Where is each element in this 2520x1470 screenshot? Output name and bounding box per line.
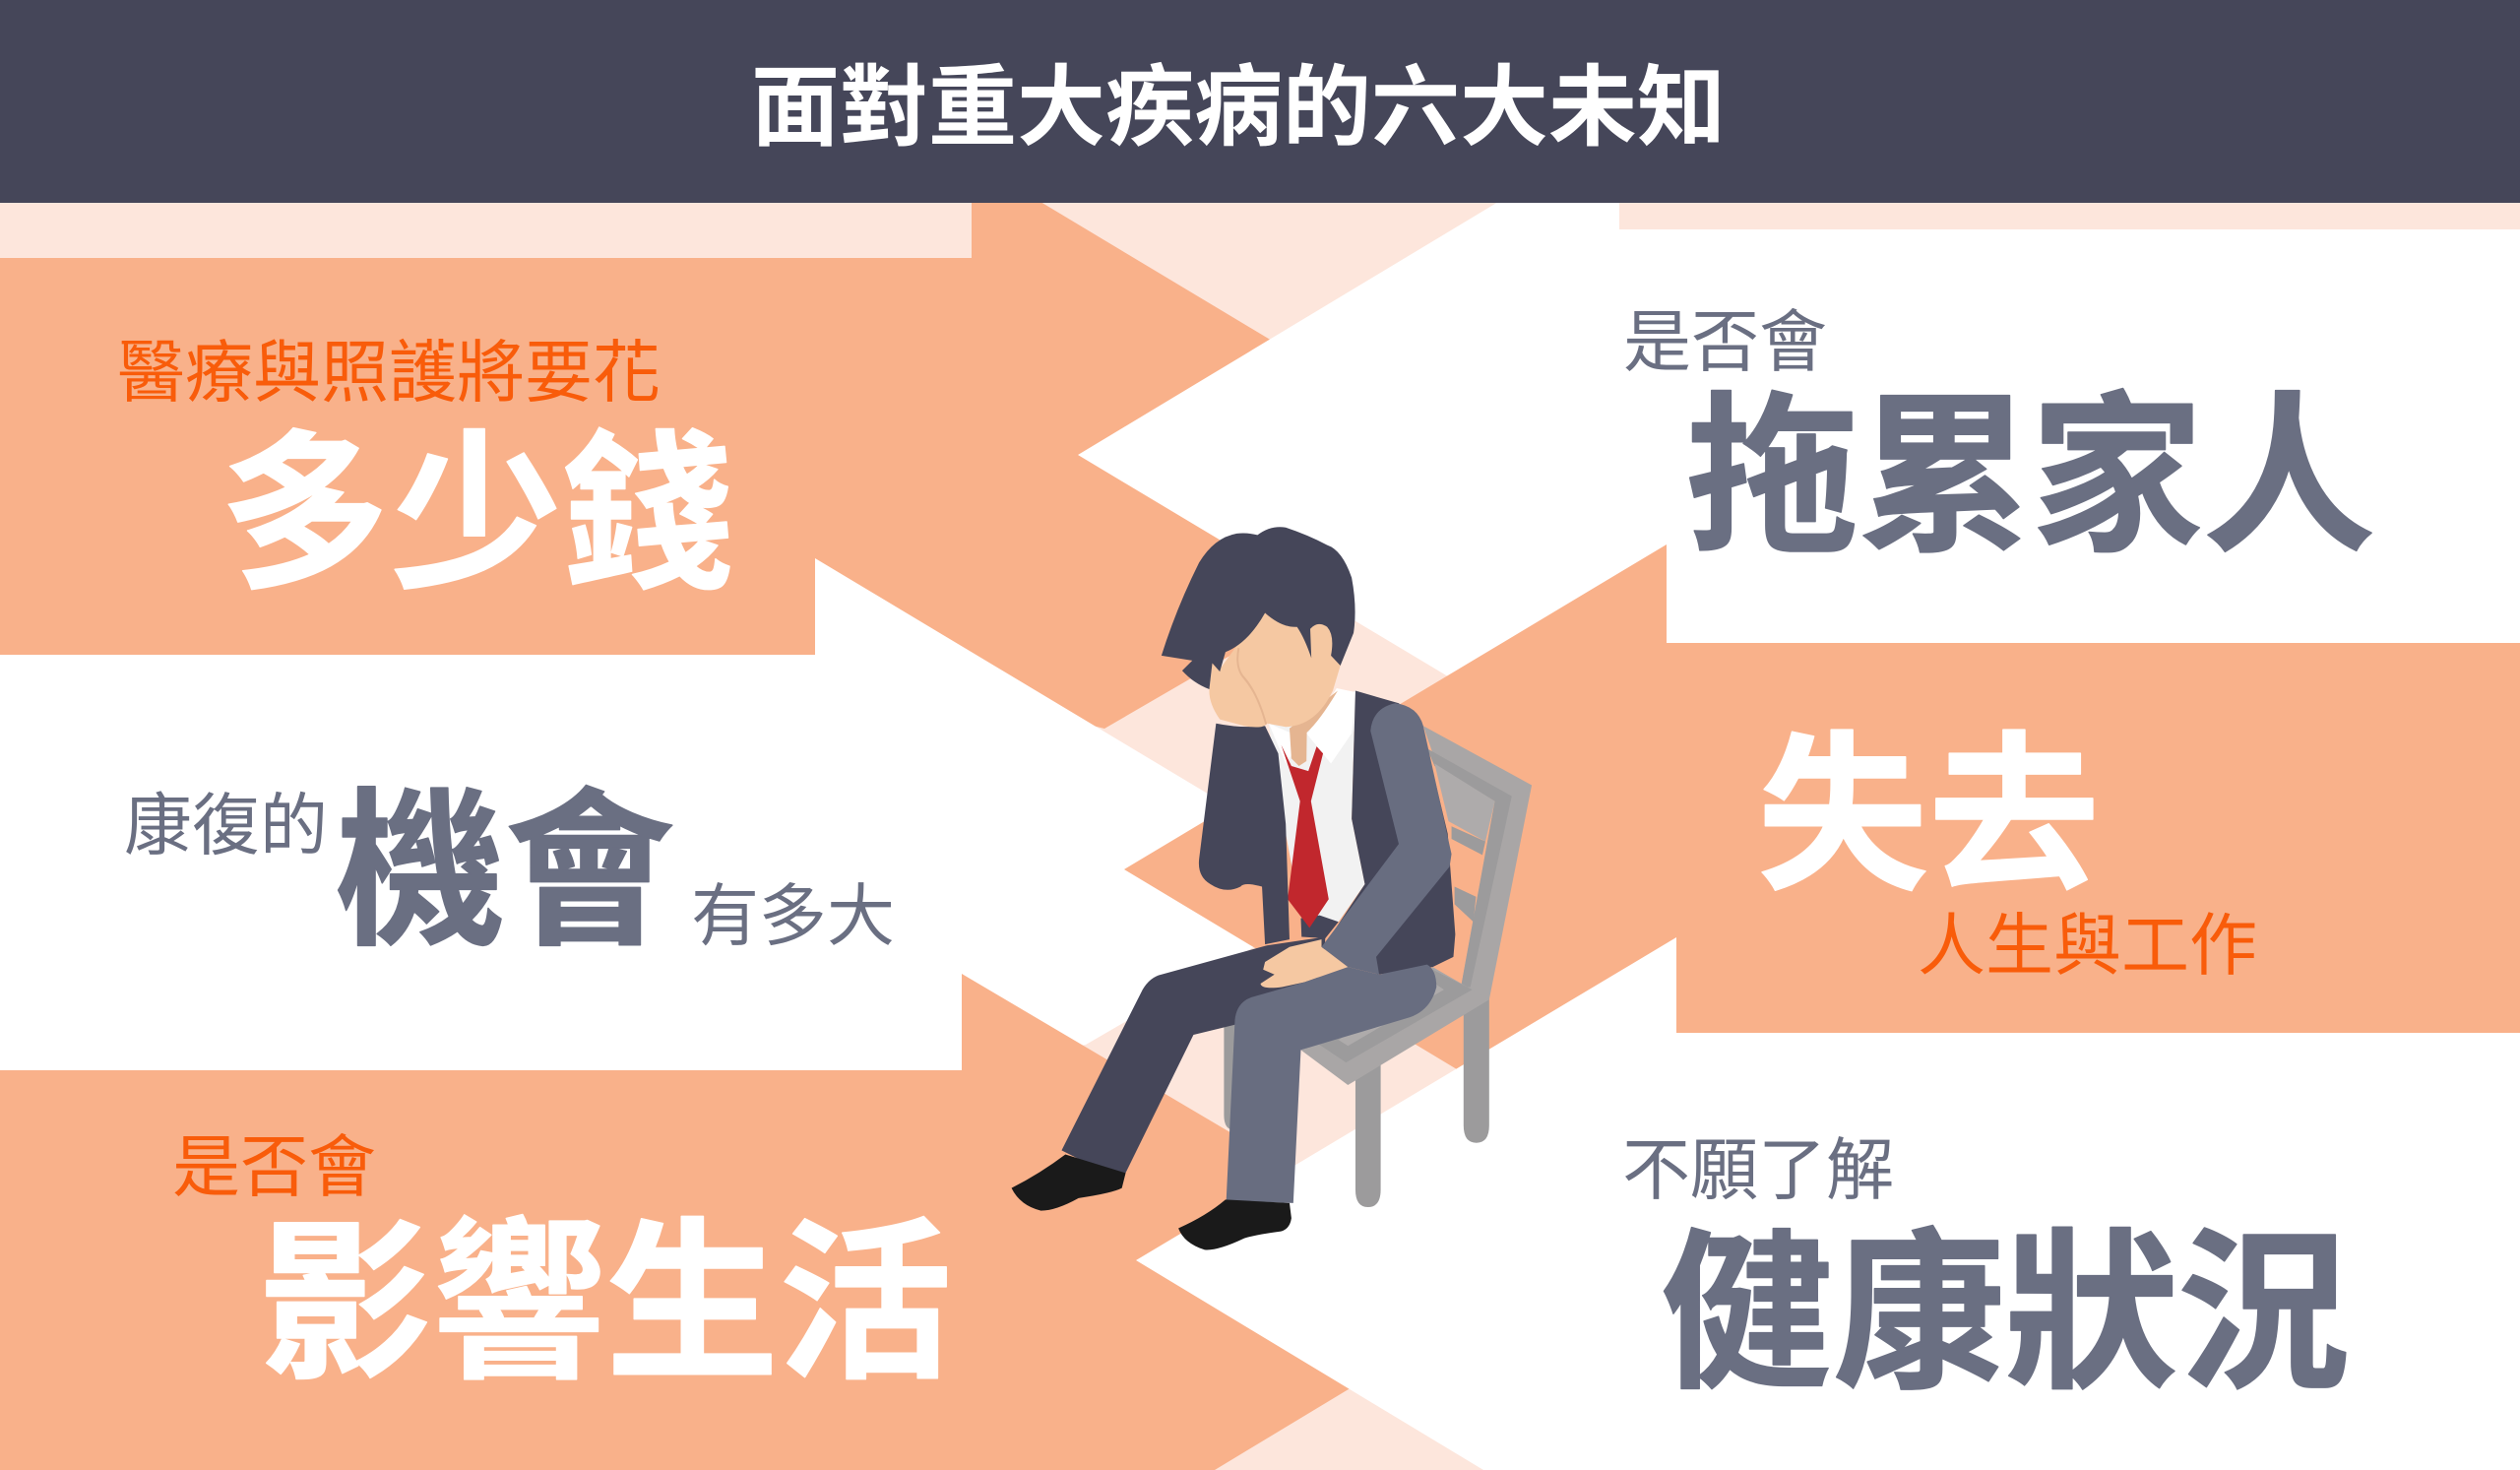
header bar	[0, 0, 2520, 203]
hair	[1162, 527, 1355, 689]
necktie	[1282, 745, 1329, 927]
illustration: worried man on chair	[1012, 527, 1532, 1249]
text block: recovery: 機會	[336, 778, 674, 967]
text block: health status: 不願了解	[1622, 1132, 1894, 1208]
text block: cost: 醫療與照護將要花	[117, 335, 661, 411]
text block: daily life: 影響生活	[259, 1208, 952, 1401]
text block: burden on family: 是否會	[1623, 304, 1827, 380]
text block: losing life and work: 人生與工作	[1918, 908, 2257, 984]
arrow: white bottom right	[1136, 937, 2520, 1470]
text block: losing life and work: 失去	[1757, 720, 2100, 912]
text block: burden on family: 拖累家人	[1686, 382, 2375, 574]
face and hand	[1209, 612, 1341, 728]
arrow: orange bottom left	[0, 974, 1505, 1470]
text block: daily life	[172, 1129, 952, 1401]
jacket: raised arm	[1199, 724, 1290, 944]
text block: health status	[1622, 1132, 2350, 1411]
chair	[1224, 726, 1532, 1207]
text block: daily life: 是否會	[172, 1129, 376, 1205]
jacket waist	[1300, 916, 1339, 938]
arrow: white middle left	[0, 558, 1360, 1070]
hand on knee	[1261, 939, 1348, 988]
arrow: white top right	[1078, 129, 2520, 807]
shoes	[1012, 1154, 1292, 1249]
title: 面對重大疾病的六大未知	[751, 59, 1726, 158]
text block: burden on family	[1623, 304, 2375, 574]
arrow: orange middle right	[1124, 544, 2520, 1201]
right sleeve	[1322, 703, 1452, 975]
text block: cost: 多少錢	[220, 418, 733, 610]
jacket: right side	[1323, 691, 1455, 975]
shirt	[1269, 691, 1365, 922]
arrow: orange top left	[0, 160, 1518, 729]
text block: recovery	[124, 778, 895, 967]
left leg	[1061, 937, 1325, 1181]
right leg	[1227, 965, 1436, 1203]
text block: recovery: 康復的	[124, 788, 328, 863]
text block: recovery: 有多大	[691, 878, 895, 954]
text block: cost	[117, 335, 733, 610]
finger crease	[1237, 648, 1266, 725]
text block: health status: 健康狀況	[1661, 1219, 2350, 1411]
text block: losing life and work	[1757, 720, 2257, 984]
collar and neck	[1269, 688, 1355, 766]
